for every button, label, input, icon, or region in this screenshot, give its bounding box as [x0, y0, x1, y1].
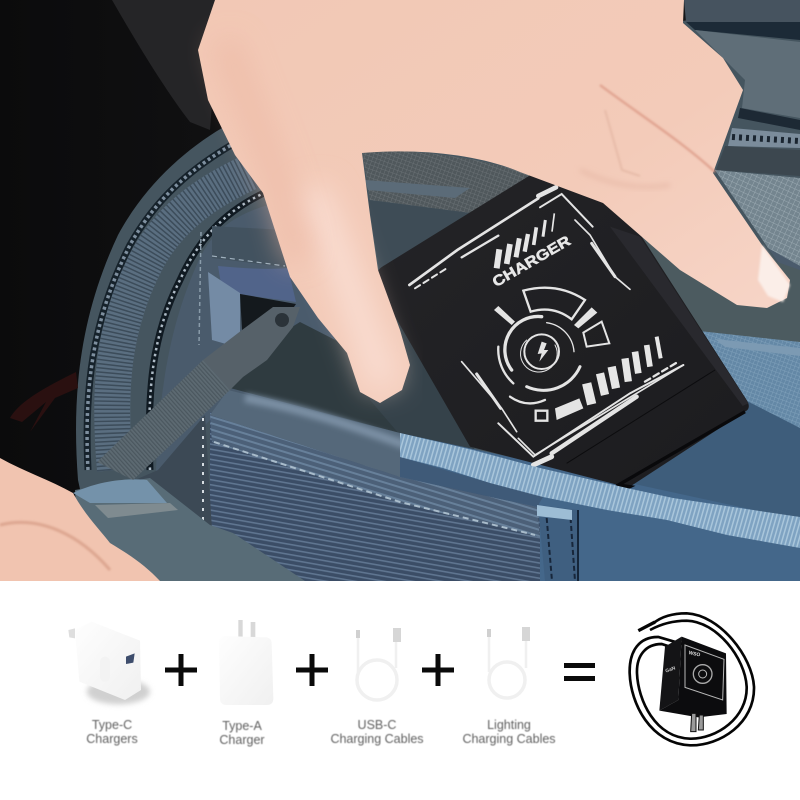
dark backdrop — [0, 0, 686, 498]
caption: Type-C: Type-C — [92, 718, 132, 732]
sleeve — [112, 0, 220, 130]
plus sign — [422, 654, 454, 686]
bolt icon — [538, 342, 548, 362]
plus sign — [165, 654, 197, 686]
front pocket — [73, 390, 800, 581]
caption: Type-A: Type-A — [222, 719, 262, 733]
finger crease — [600, 85, 715, 172]
charger body — [378, 176, 749, 486]
zipper pull strap — [97, 272, 300, 480]
hand — [198, 0, 790, 403]
hatch marks — [497, 213, 661, 404]
box label: WSO — [688, 650, 701, 658]
item: Type-C charger — [68, 622, 150, 704]
thumb highlight — [310, 190, 385, 385]
padded zipper band — [87, 140, 240, 470]
prongs — [691, 713, 703, 732]
rubber tab — [208, 272, 240, 348]
printed frame graphics — [409, 187, 683, 465]
top right straps — [684, 0, 800, 20]
item: Lightning cable — [487, 627, 530, 698]
lower left fabric — [75, 478, 305, 581]
caption: USB-C: USB-C — [358, 718, 396, 732]
vertical seam strip — [538, 505, 578, 581]
caption: Type-C: Chargers — [86, 732, 138, 746]
item: USB-C cable — [356, 628, 401, 700]
combined product — [630, 613, 754, 745]
shadowed lining right of thumb — [370, 318, 474, 449]
mesh panel behind hand — [362, 150, 540, 213]
frayed seam fading left — [245, 398, 405, 445]
caption: USB-C: Charging Cables — [330, 732, 424, 746]
right panel beside charger — [778, 262, 800, 276]
side label: GaN — [665, 665, 677, 675]
backpack body — [76, 0, 800, 581]
bottom strip: product equation — [68, 613, 754, 747]
plus sign — [296, 654, 328, 686]
caption: Lighting: Charging Cables — [462, 732, 556, 746]
box front — [659, 637, 727, 717]
wedges — [523, 288, 585, 319]
item: Type-A charger — [219, 620, 273, 705]
lower left hand — [0, 458, 160, 581]
side loop — [10, 372, 78, 432]
caption: Type-A: Charger — [219, 733, 265, 747]
left seam — [135, 415, 212, 530]
caption: Lighting: Lighting — [487, 718, 531, 732]
inner lining — [156, 206, 372, 470]
label: CHARGER: CHARGER — [490, 233, 574, 291]
buckle — [203, 307, 300, 390]
photo: hand placing charger in backpack — [0, 0, 800, 581]
lower right pocket — [400, 433, 800, 581]
mesh panel — [210, 412, 540, 581]
captions — [86, 718, 556, 747]
charger — [375, 143, 749, 488]
fold above mesh — [210, 390, 400, 477]
nail — [758, 245, 790, 302]
equals sign — [564, 666, 595, 678]
dark compartment under thumb — [232, 322, 398, 432]
thumb and index finger — [198, 0, 790, 403]
top hem — [400, 433, 800, 548]
box side — [659, 637, 682, 711]
rings — [524, 334, 559, 369]
dark gap behind buckle — [240, 294, 296, 330]
retractable cables — [630, 613, 754, 745]
